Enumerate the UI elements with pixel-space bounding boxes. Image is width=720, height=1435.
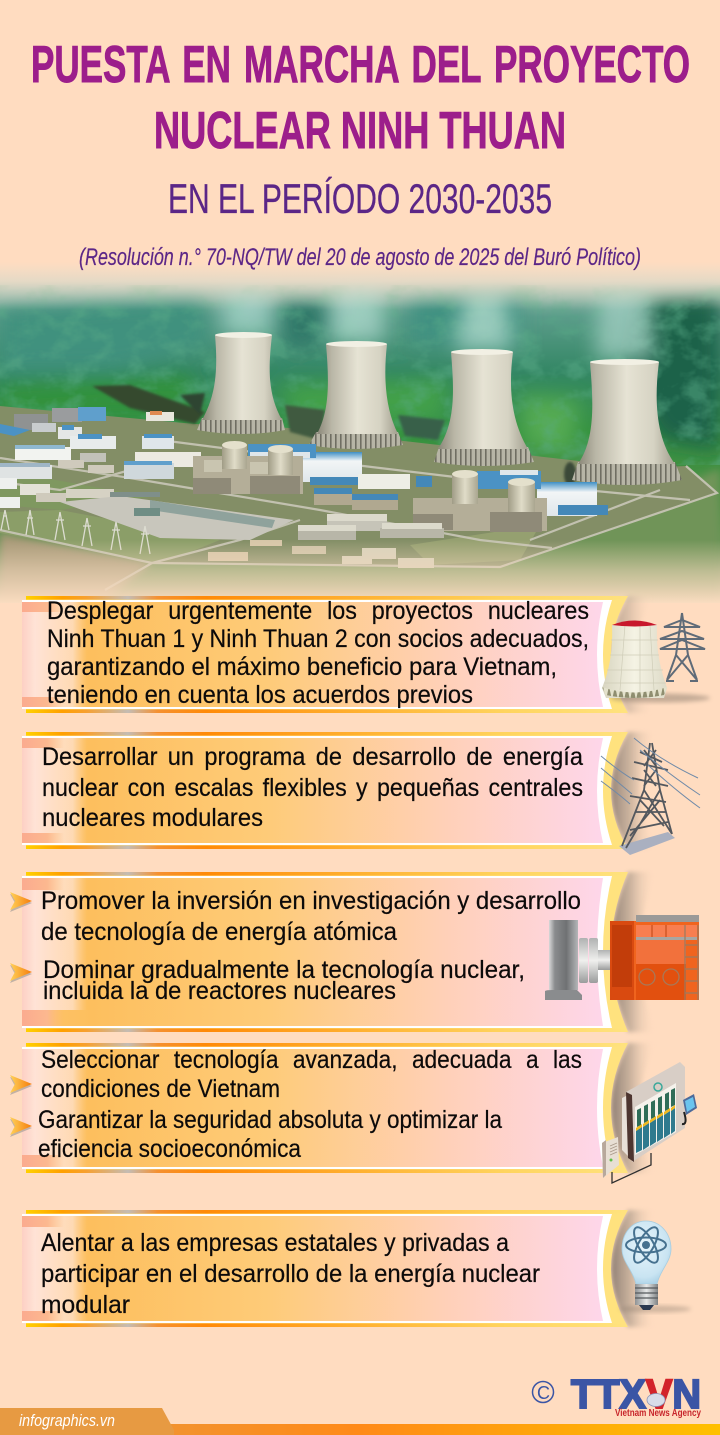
panel 2: programa de energía nuclear: [22, 732, 700, 855]
panel 4 text: [38, 1046, 582, 1163]
panel 5 text: modular: [41, 1291, 130, 1319]
icon: cooling tower and pylon: [602, 613, 710, 702]
cooling towers: [197, 332, 682, 485]
panel 3 text: de tecnología de energía atómica: [41, 918, 397, 946]
subtitle period: EN EL PERÍODO 2030-2035: [168, 175, 552, 222]
panel 5 text: [41, 1229, 540, 1319]
agency name: Vietnam News Agency: [615, 1408, 701, 1419]
ground outside site: [572, 468, 720, 544]
panel 4 text: Seleccionar tecnología avanzada, adecuada a las: [41, 1046, 582, 1074]
panel 3: inversión y tecnología: [10, 872, 699, 1032]
copyright symbol: C: [537, 1383, 550, 1403]
admin buildings left: [0, 407, 201, 508]
panel 1 text: Ninh Thuan 1 y Ninh Thuan 2 con socios adecuados,: [47, 625, 589, 653]
panel 3 text: [41, 887, 581, 1005]
bottom and top fades: [0, 540, 720, 603]
panel 3 text: Promover la inversión en investigación y desarrollo: [41, 887, 581, 915]
pylons: [1, 510, 150, 554]
arrow bullet 2: [10, 1117, 32, 1137]
panel 2 text: Desarrollar un programa de desarrollo de energía: [42, 743, 583, 771]
lower service buildings: [208, 514, 444, 568]
website label: infographics.vn: [19, 1411, 115, 1430]
copyright symbol: [532, 1382, 554, 1403]
arrow bullet 1: [10, 892, 32, 912]
icon: generator: [545, 915, 699, 1000]
panel 1 text: Desplegar urgentemente los proyectos nucleares: [47, 597, 589, 625]
panel 4 text: condiciones de Vietnam: [41, 1075, 280, 1103]
site ground: [0, 406, 717, 567]
panel 2 text: nuclear con escalas flexibles y pequeñas centrales: [42, 774, 583, 802]
panel 3 text: Dominar gradualmente la tecnología nuclear,: [43, 956, 525, 984]
panel 5 text: Alentar a las empresas estatales y privadas a: [41, 1229, 509, 1257]
icon: transmission pylon: [601, 738, 700, 855]
panel 1 text: [47, 597, 589, 709]
panel 2 text: [42, 743, 583, 832]
footer band: [0, 1408, 720, 1435]
panel 1 text: teniendo en cuenta los acuerdos previos: [47, 681, 473, 709]
title block: [31, 36, 690, 271]
illustration: nuclear power plant: [0, 262, 720, 603]
arrow bullet 1: [10, 1075, 32, 1095]
panel 5: empresas estatales y privadas: [22, 1210, 691, 1327]
icon: atom light bulb: [619, 1221, 691, 1312]
panel 4 text: Garantizar la seguridad absoluta y optimizar la: [38, 1106, 502, 1134]
roads: [0, 440, 717, 590]
icon: control cabinet: [602, 1062, 697, 1183]
reactor complex B: [314, 470, 608, 532]
panel 4 text: eficiencia socioeconómica: [38, 1135, 301, 1163]
panel 1: proyectos Ninh Thuan: [22, 596, 710, 713]
panel 5 text: participar en el desarrollo de la energía nuclear: [41, 1260, 540, 1288]
arrow bullet 2: [10, 963, 32, 983]
panel 4: tecnología avanzada y seguridad: [10, 1043, 697, 1183]
TTXVN wordmark: TTXVN: [571, 1371, 701, 1417]
reactor complex A: [193, 441, 370, 494]
panel 1 text: garantizando el máximo beneficio para Vietnam,: [47, 653, 557, 681]
switchyard: [60, 492, 294, 540]
logo: copyright TTXVN: [532, 1371, 701, 1419]
panel 3 text: incluida la de reactores nucleares: [43, 977, 396, 1005]
globe mark on the V: [647, 1394, 665, 1406]
panel 2 text: nucleares modulares: [42, 804, 263, 832]
